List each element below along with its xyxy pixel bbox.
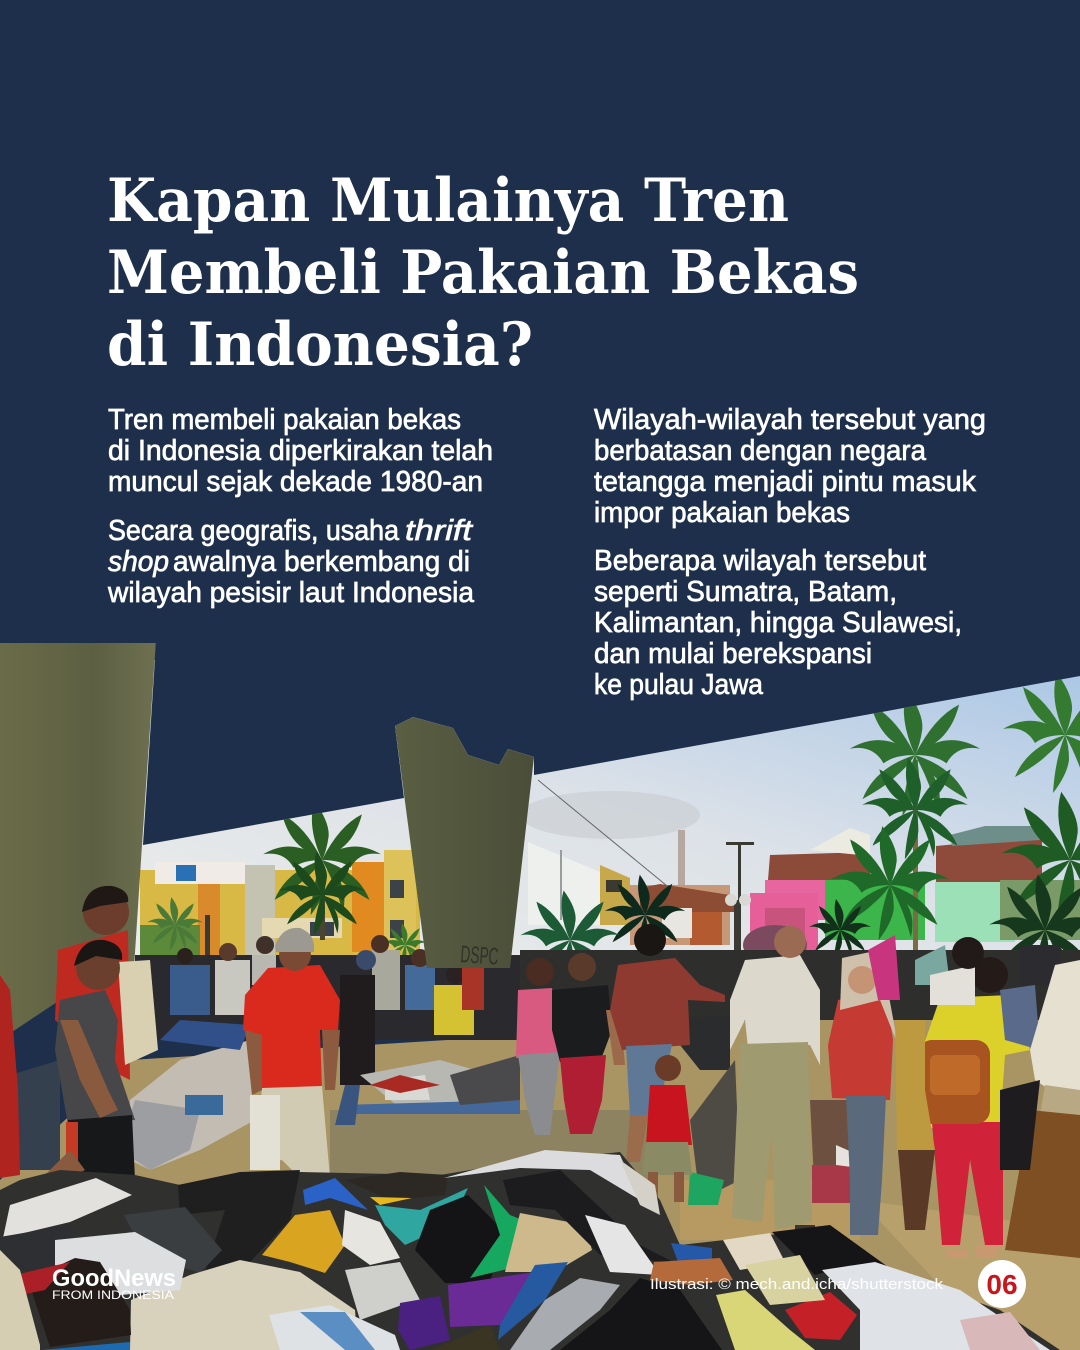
pavement ground — [0, 1020, 1045, 1282]
text block: right column paragraph 1 — [594, 404, 986, 529]
text block: right column paragraph 1: Wilayah-wilayah tersebut yang — [594, 404, 986, 436]
people: woman in pink — [516, 958, 562, 1135]
text block: left column paragraph 2: Secara geografis, usaha — [108, 515, 400, 547]
far crowd band — [135, 935, 1080, 1085]
clothes pile foreground — [0, 1150, 1060, 1350]
mid ground clothes — [10, 1015, 870, 1205]
people: woman in yellow with orange backpack — [895, 957, 1030, 1258]
title — [107, 166, 859, 380]
page number badge — [978, 1260, 1026, 1308]
graffiti on pillar: DSPC — [460, 941, 499, 971]
text block: left column paragraph 2: thrift — [405, 515, 474, 547]
palm trees — [147, 673, 1080, 986]
purple quilts — [448, 1272, 530, 1327]
title: Membeli Pakaian Bekas — [107, 238, 859, 308]
sky — [134, 660, 1080, 961]
people: red edge figure — [0, 975, 20, 1178]
title: Kapan Mulainya Tren — [107, 166, 789, 236]
people: boy in grey shirt — [45, 940, 135, 1185]
centre pillar — [395, 717, 534, 968]
people: small child in red — [642, 1055, 692, 1202]
cloud — [520, 791, 700, 839]
text block: right column paragraph 2: seperti Sumatra, Batam, — [594, 576, 897, 608]
left pillar — [0, 640, 156, 1060]
text block: left column paragraph 2: awalnya berkembang di — [173, 546, 470, 578]
people: man in red shirt and cap — [243, 928, 360, 1178]
logo: GoodNews from Indonesia: FROM INDONESIA — [52, 1288, 174, 1302]
people: woman in black with red trousers — [552, 953, 625, 1134]
logo: GoodNews from Indonesia: GoodNews — [52, 1265, 176, 1292]
people: man with red scarf — [55, 886, 158, 1080]
photo: market scene under flyover — [0, 640, 1080, 1350]
people: woman in plaid shirt — [610, 924, 725, 1162]
centre buildings — [528, 830, 740, 945]
text block: right column paragraph 1: berbatasan dengan negara — [594, 435, 927, 467]
people: old man in white shirt and khaki trousers — [730, 926, 820, 1232]
text block: left column paragraph 1 — [108, 404, 493, 498]
text block: left column paragraph 1: muncul sejak dekade 1980-an — [108, 466, 483, 498]
text block: right column paragraph 2 — [594, 545, 962, 701]
text block: left column paragraph 1: Tren membeli pakaian bekas — [108, 404, 461, 436]
people: right figure with brown skirt — [1000, 960, 1080, 1258]
left buildings — [140, 850, 420, 955]
text block: right column paragraph 2: Beberapa wilayah tersebut — [594, 545, 926, 577]
text block: right column paragraph 2: dan mulai berekspansi — [594, 638, 872, 670]
cream sack — [130, 1260, 358, 1350]
photo clipped area — [0, 640, 1080, 1350]
text block: right column paragraph 2: ke pulau Jawa — [594, 669, 764, 701]
text block: right column paragraph 2: Kalimantan, hingga Sulawesi, — [594, 607, 962, 639]
title: di Indonesia? — [107, 310, 533, 380]
page number badge: 06 — [986, 1269, 1018, 1300]
people: background women — [868, 935, 1060, 1050]
text block: left column paragraph 2: wilayah pesisir laut Indonesia — [107, 577, 475, 609]
text block: left column paragraph 1: di Indonesia diperkirakan telah — [108, 435, 493, 467]
flowering bush — [743, 925, 807, 950]
people: woman in hijab and red plaid — [828, 952, 898, 1235]
right buildings — [750, 826, 1080, 953]
street lamp and pole — [205, 780, 754, 960]
text block: left column paragraph 2 — [107, 515, 475, 609]
text block: right column paragraph 1: tetangga menjadi pintu masuk — [594, 466, 976, 498]
text block: left column paragraph 2: shop — [108, 546, 169, 578]
text block: right column paragraph 1: impor pakaian bekas — [594, 497, 850, 529]
photo credit: Ilustrasi: © mech.and.icha/shutterstock — [650, 1276, 944, 1293]
